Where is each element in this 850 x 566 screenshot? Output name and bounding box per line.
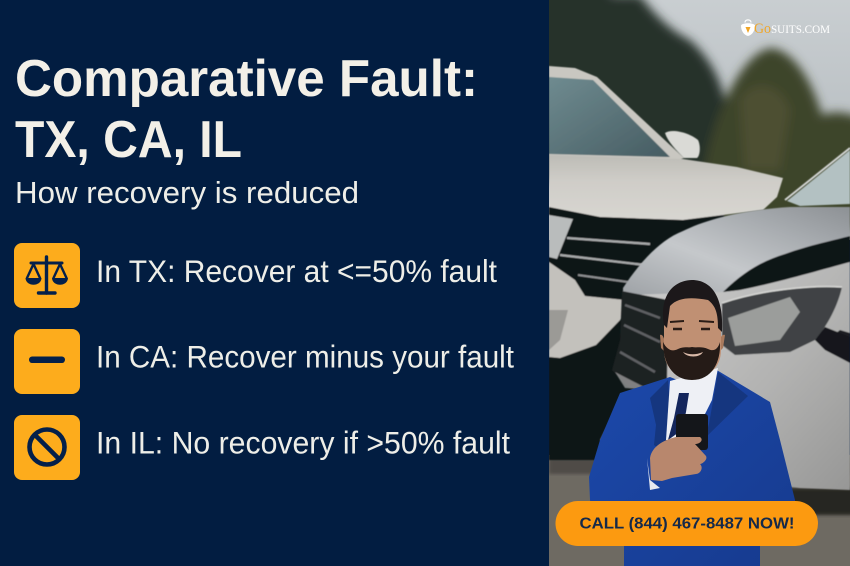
- mirror: [665, 131, 700, 158]
- headlight: [549, 215, 573, 259]
- panel: navy text background: [0, 0, 549, 566]
- black trim beside headlight: [815, 327, 850, 363]
- lower bumper edge: [600, 430, 604, 440]
- windshield: [787, 150, 850, 206]
- title: Comparative Fault:: [15, 50, 478, 108]
- call to action button: [556, 501, 818, 546]
- man in blue suit: [589, 280, 795, 566]
- windshield: [549, 77, 670, 157]
- bumper: [549, 262, 625, 358]
- roof and pillar: [549, 66, 684, 162]
- sky and blurred trees: [520, 0, 850, 240]
- ears: [660, 335, 725, 352]
- grille: [612, 291, 668, 388]
- silver car: [600, 148, 850, 490]
- white car: [549, 66, 783, 460]
- panel: crash photo: [520, 0, 850, 566]
- icon: prohibition sign: [14, 415, 80, 480]
- body: [640, 261, 850, 491]
- eyes: [673, 328, 710, 330]
- icon: scales of justice: [14, 243, 80, 308]
- item text: In IL: No recovery if >50% fault: [96, 424, 510, 460]
- icon: minus sign: [14, 329, 80, 394]
- hood: [623, 207, 850, 295]
- subtitle: How recovery is reduced: [15, 175, 359, 210]
- headlight: [722, 287, 842, 355]
- tie: [668, 393, 689, 440]
- hand: [650, 437, 706, 481]
- dark slash in hood: [723, 236, 850, 292]
- list item: California: [14, 329, 514, 394]
- dark lower body: [549, 205, 730, 460]
- jacket: [589, 369, 795, 566]
- right lower shadow: [837, 330, 850, 338]
- neck and shirt: [666, 368, 718, 440]
- grille chrome bars: [567, 238, 650, 244]
- icon: lock shield: [741, 20, 755, 36]
- wordmark: GoSUITS.COM: [754, 21, 830, 37]
- list item: Illinois: [14, 415, 510, 480]
- ground: [549, 455, 850, 566]
- phone: [676, 414, 708, 450]
- logo: GoSuits.com: [741, 20, 830, 37]
- title: TX, CA, IL: [15, 111, 242, 169]
- hood: [549, 155, 783, 220]
- list item: Texas: [14, 243, 497, 308]
- hair: [663, 280, 722, 332]
- item text: In TX: Recover at <=50% fault: [96, 253, 497, 289]
- beard: [663, 342, 720, 380]
- shirt cuff: [647, 458, 660, 490]
- title: [15, 50, 478, 169]
- item text: In CA: Recover minus your fault: [96, 338, 514, 374]
- call to action button: CALL (844) 467-8487 NOW!: [580, 516, 794, 532]
- face: [664, 298, 721, 372]
